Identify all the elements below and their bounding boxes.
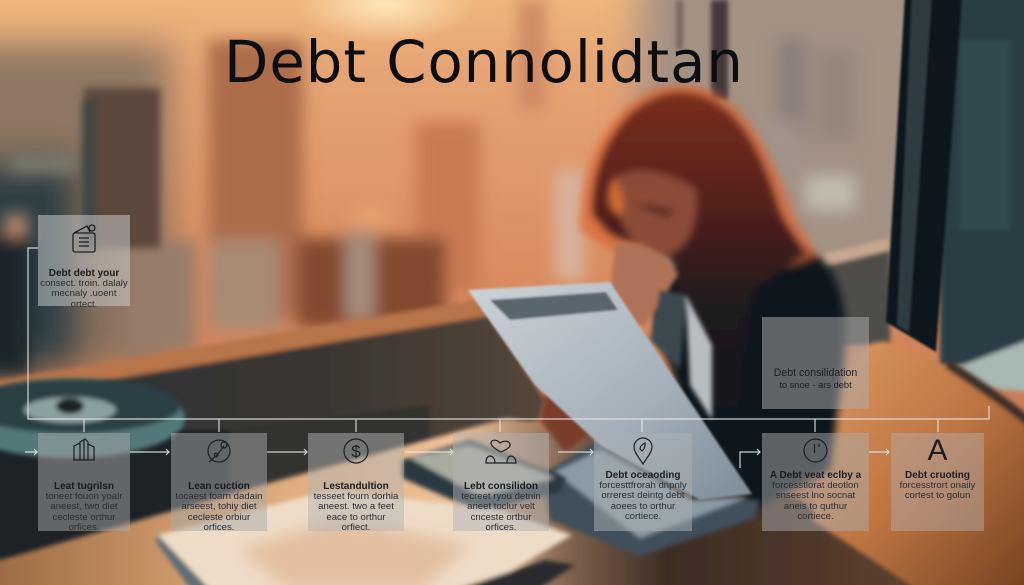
text: step 7: forcesstrort onaiiy [900, 480, 975, 491]
text: step 6: aneis to quthur [784, 501, 847, 512]
icon: people and heart [485, 440, 517, 464]
papers on table [156, 490, 575, 585]
text: step 2: arseest, tohiy diet [181, 501, 257, 512]
text: callout: to snoe - ars debt [779, 380, 852, 390]
card: upper right callout [762, 317, 869, 409]
icon: wallet [72, 224, 96, 253]
clipboard under document [540, 440, 760, 556]
text: step 5: orrerest deintg debt [601, 490, 685, 501]
chair [812, 342, 1024, 585]
icon: buildings [73, 438, 95, 461]
text: step 3: orfiect. [342, 522, 370, 533]
text: step 4 [461, 481, 541, 533]
text: top left step: ortect. [71, 299, 97, 310]
card: step 6 [762, 433, 869, 531]
balcony glass and rail [0, 298, 545, 570]
text: step 5: forcesttfrorah dnpnly [599, 480, 687, 491]
text: step 3 [314, 481, 398, 533]
document [468, 282, 752, 500]
icon: dollar: $ [351, 442, 361, 461]
distant haze at left [0, 0, 940, 370]
right window pane [940, 0, 1024, 392]
text: top left step: mecnaly .uoent [51, 288, 117, 299]
text: top left step: Debt debt your [49, 268, 119, 279]
text: step 3: tesseet fourn dorhia [314, 491, 398, 502]
card: step 1 [38, 433, 130, 531]
text: step 1: cecleste orthur [53, 512, 115, 523]
text: step 6 [770, 470, 862, 522]
text: step 4: Lebt consilidon [464, 481, 538, 492]
title: Debt Connolidtan [224, 29, 744, 96]
text: step 1: toneet fouon yoalr [46, 491, 122, 502]
text: step 6: forcesstlorat deotlon [772, 480, 859, 491]
text: step 2: orfices. [204, 522, 234, 533]
text: step 3: aneest. two a feet [318, 501, 394, 512]
woman [468, 84, 845, 556]
text: top left step: consect. troin. dalaly [40, 278, 128, 289]
text: step 7: cortest to golun [905, 490, 970, 501]
text: step 1: orfices. [69, 522, 99, 533]
icon: clock [803, 438, 828, 463]
card: step 7 [891, 433, 984, 531]
text: step 3: Lestandultion [323, 481, 389, 492]
wood table [0, 418, 930, 585]
text: step 3: eace to orthur [326, 512, 386, 523]
text: step 4: orfices. [486, 522, 516, 533]
text: step 4: tecreet ryou detnin [461, 491, 541, 502]
text: step 5: aoees to orthur [611, 501, 675, 512]
text: step 4: aneet toclur velt [467, 501, 535, 512]
window frame [886, 0, 962, 352]
text: callout: Debt consilidation [774, 367, 857, 379]
card: step 3 [308, 433, 404, 531]
text: step 4: cnceste ortbur [471, 512, 531, 523]
card: step 4 [453, 433, 549, 531]
text: step 1 [46, 481, 122, 533]
text: step 1: Leat tugrilsn [54, 481, 114, 492]
icon: letter A: A [927, 434, 948, 467]
round side table [0, 378, 185, 458]
text: step 7 [900, 470, 976, 501]
text: step 2: Lean cuction [188, 481, 250, 492]
text: top left step [40, 268, 128, 310]
icon: location pin [633, 437, 653, 465]
text: step 7: Debt cruoting [905, 470, 970, 481]
text: step 6: cortiece. [797, 511, 834, 522]
card: top left debt step [38, 215, 130, 306]
text: step 2: cecleste orbiur [188, 512, 250, 523]
text: step 5: cortiece. [625, 511, 661, 522]
card: step 5 [594, 433, 692, 531]
icon: gauge [207, 439, 231, 463]
text: step 6: A Debt veat eclby a [770, 470, 861, 481]
text: step 1: aneest, two diet [50, 501, 118, 512]
icon: dollar [343, 438, 369, 464]
calculator [402, 440, 566, 512]
text: step 6: snseest lno socnat [776, 490, 855, 501]
text: step 5 [599, 470, 687, 522]
card: step 2 [171, 433, 267, 531]
text: step 2: tocaest foarn dadain [176, 491, 262, 502]
text: step 5: Debt oceaoding [605, 470, 680, 481]
text: callout [774, 367, 857, 390]
text: step 2 [176, 481, 262, 533]
